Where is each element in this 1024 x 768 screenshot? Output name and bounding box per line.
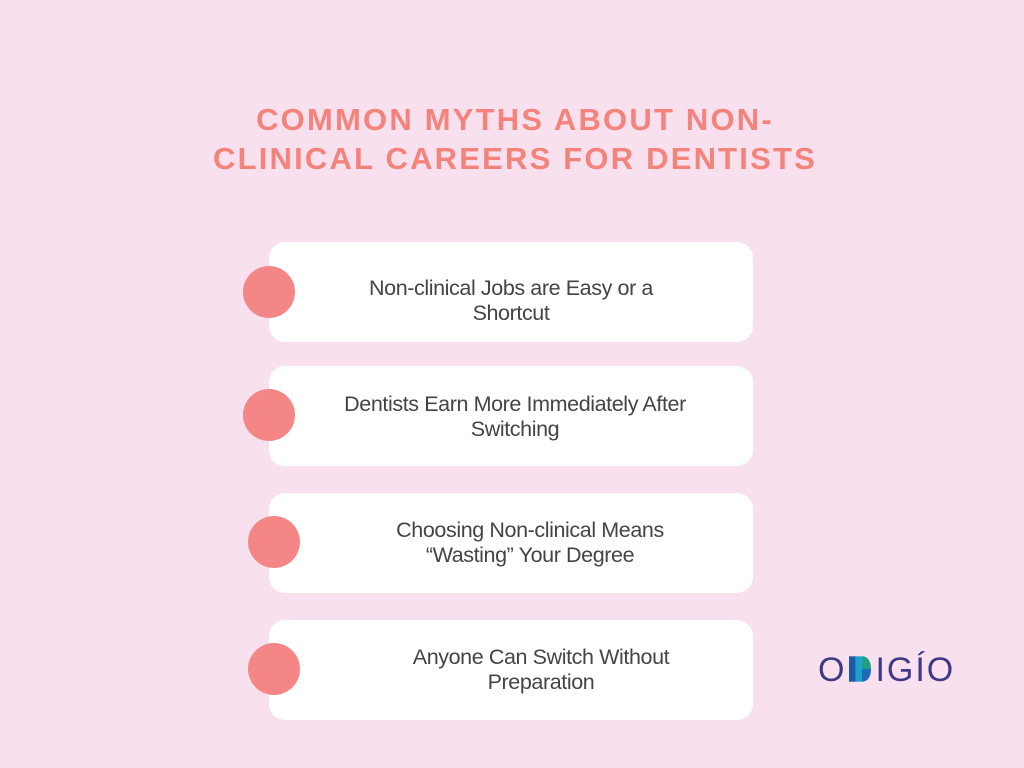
text 2 [344, 392, 686, 441]
title: CLINICAL CAREERS FOR DENTISTS [213, 141, 817, 176]
title: COMMON MYTHS ABOUT NON- [256, 102, 774, 137]
text 3: “Wasting” Your Degree [426, 543, 634, 567]
text 1: Shortcut [473, 301, 549, 325]
text 2: Switching [471, 417, 559, 441]
text 1 [369, 276, 654, 325]
icon: circle 4 [248, 643, 300, 695]
text 2: Dentists Earn More Immediately After [344, 392, 686, 416]
text 4: Anyone Can Switch Without [413, 645, 669, 669]
text 4: Preparation [488, 670, 594, 694]
icon: circle 2 [243, 389, 295, 441]
text 1: Non-clinical Jobs are Easy or a [369, 276, 653, 300]
logo: O IGÍO [818, 651, 955, 689]
card 4 [269, 620, 753, 720]
icon: circle 1 [243, 266, 295, 318]
text 3 [396, 518, 664, 567]
text 3: Choosing Non-clinical Means [396, 518, 664, 542]
icon: circle 3 [248, 516, 300, 568]
card 2 [269, 366, 753, 466]
title [213, 102, 817, 176]
card 3 [269, 493, 753, 593]
text 4 [412, 645, 670, 694]
card 1 [269, 242, 753, 342]
